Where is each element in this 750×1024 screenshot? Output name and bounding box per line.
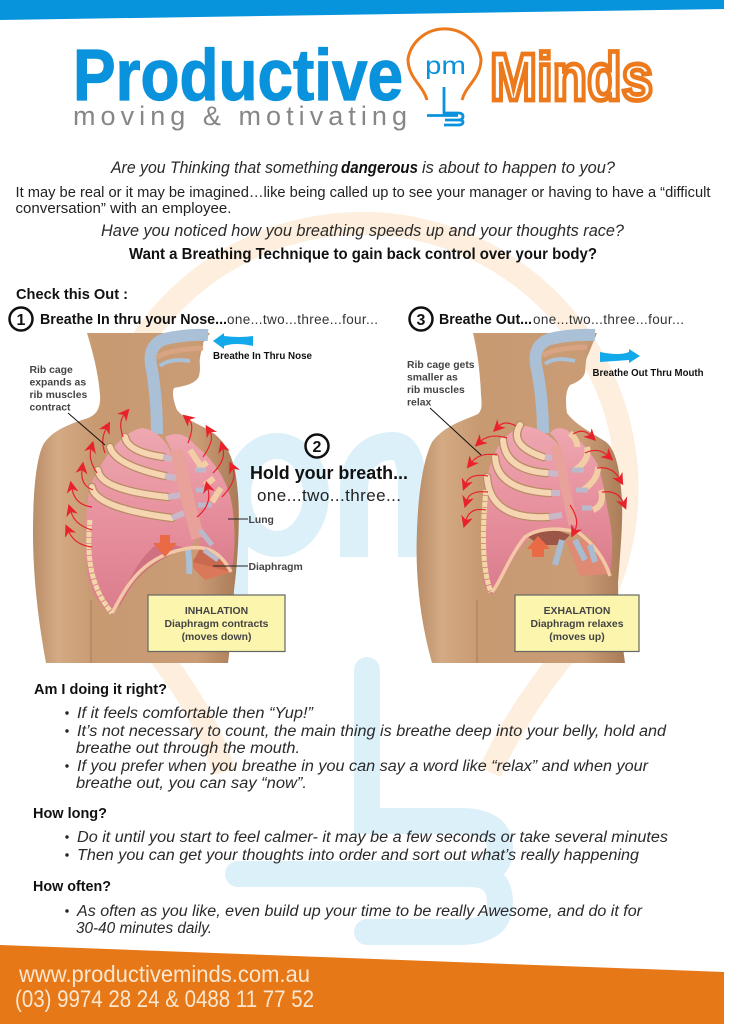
lungs — [483, 426, 574, 594]
body — [417, 333, 625, 663]
label: diaphragm: Diaphragm — [248, 562, 303, 573]
section: am I doing it right — [34, 681, 667, 792]
sternum — [556, 445, 573, 525]
logo wordmark: Productive: Productive — [73, 36, 403, 116]
caption: inhalation: INHALATION — [185, 606, 248, 617]
section: how long: How long? — [33, 805, 107, 822]
arrow: diaphragm up — [527, 536, 550, 557]
label: rib cage: relax — [407, 398, 431, 408]
call to action: Want a Breathing Technique to gain back control over your body? — [129, 246, 597, 263]
body — [33, 333, 239, 663]
section: how long: Do it until you start to feel calmer- it may be a few seconds or take several minutes — [77, 829, 668, 846]
number badge 3 — [410, 308, 432, 330]
label: rib cage: rib muscles — [30, 390, 87, 401]
logo wordmark: Minds: Minds — [490, 40, 653, 115]
diaphragm — [193, 558, 232, 580]
step 1 heading — [10, 308, 378, 330]
footer contact details: (03) 9974 28 24 & 0488 11 77 52 — [15, 986, 314, 1013]
ribs — [92, 437, 172, 518]
second question: Have you noticed how you breathing speeds up and your thoughts race? — [101, 222, 625, 240]
label: rib cage: Rib cage — [30, 365, 73, 376]
label: rib cage: rib muscles — [407, 385, 465, 396]
section: how long — [33, 805, 668, 864]
label: rib cage: Rib cage gets — [407, 360, 475, 371]
section: am I doing it right: If it feels comfortable then “Yup!” — [77, 705, 314, 722]
label: breathe in thru nose: Breathe In Thru Nose — [213, 350, 312, 362]
caption: inhalation: (moves down) — [182, 632, 251, 643]
step 2: hold your breath — [250, 434, 408, 505]
logo — [73, 29, 653, 131]
blue arrow: breathe in — [213, 333, 253, 349]
number badge 3: 3 — [417, 312, 426, 329]
footer contact details — [15, 961, 314, 1013]
section: how often: As often as you like, even build up your time to be really Awesome, and do it for — [76, 903, 643, 920]
footer banner — [0, 945, 724, 1024]
arrow: diaphragm down — [153, 535, 177, 557]
check this out heading: Check this Out : — [16, 286, 128, 303]
caption: exhalation: (moves up) — [549, 632, 605, 643]
label: rib cage: smaller as — [407, 372, 458, 384]
logo bulb icon: pm — [425, 52, 466, 80]
step 1 heading: Breathe In thru your Nose... — [40, 312, 227, 328]
section: am I doing it right: Am I doing it right? — [34, 681, 167, 698]
logo tagline: moving & motivating — [73, 101, 407, 131]
number badge 2 — [306, 434, 328, 458]
left illustration: inhalation — [30, 333, 303, 663]
step 3 heading — [410, 308, 684, 330]
contraction arrows — [466, 423, 623, 530]
section: how often: 30-40 minutes daily. — [76, 920, 212, 937]
caption: exhalation — [515, 595, 639, 652]
step 2: hold your breath: Hold your breath... — [250, 462, 408, 483]
number badge 2: 2 — [313, 439, 322, 456]
right illustration: exhalation — [407, 333, 639, 663]
intro question: dangerous — [341, 159, 418, 177]
intro paragraph: It may be real or it may be imagined…like being called up to see your manager or having to have a “difficult — [16, 185, 710, 201]
section: how long: Then you can get your thoughts into order and sort out what’s really happening — [77, 847, 639, 864]
label: rib cage — [30, 365, 105, 445]
step 3 heading: one...two...three...four... — [533, 312, 684, 327]
caption: inhalation — [148, 595, 285, 652]
ribs — [487, 425, 550, 517]
section: am I doing it right: If you prefer when you breathe in you can say a word like “relax” and when your — [77, 758, 649, 775]
blue arrow: breathe out — [600, 349, 640, 363]
intro paragraph — [16, 185, 710, 217]
watermark: pm letters and hand — [235, 446, 500, 932]
footer contact details: www.productiveminds.com.au — [18, 961, 310, 987]
diaphragm — [566, 540, 610, 576]
airway — [151, 335, 208, 434]
top banner — [0, 0, 724, 20]
intro question — [110, 159, 616, 177]
section: how often: How often? — [33, 878, 111, 895]
label: rib cage — [407, 360, 481, 455]
intro question: is about to happen to you? — [422, 159, 616, 177]
section: am I doing it right: breathe out through the mouth. — [76, 740, 300, 757]
expansion arrows — [69, 415, 234, 547]
label: diaphragm — [213, 562, 303, 573]
section: am I doing it right: It’s not necessary to count, the main thing is breathe deep into your belly, hold and — [77, 723, 667, 740]
lungs — [86, 428, 199, 615]
label: lung — [228, 515, 274, 526]
section: how often — [33, 878, 643, 937]
label: rib cage: expands as — [30, 378, 86, 388]
number badge 1: 1 — [17, 312, 26, 329]
label: rib cage: contract — [30, 402, 71, 414]
step 1 heading: one...two...three...four... — [227, 312, 378, 327]
label: breathe out thru mouth: Breathe Out Thru Mouth — [592, 367, 704, 379]
number badge 1 — [10, 308, 32, 330]
section: am I doing it right: breathe out, you can say “now”. — [76, 775, 307, 792]
intro question: Are you Thinking that something — [110, 159, 339, 177]
watermark: large light bulb outline — [97, 223, 627, 772]
sternum — [176, 450, 198, 538]
logo bulb icon — [408, 29, 481, 125]
caption: exhalation: EXHALATION — [544, 606, 610, 617]
caption: inhalation: Diaphragm contracts — [165, 619, 269, 630]
label: lung: Lung — [248, 515, 274, 526]
caption: exhalation: Diaphragm relaxes — [531, 619, 624, 630]
intro paragraph: conversation” with an employee. — [16, 201, 231, 217]
airway — [536, 335, 595, 433]
step 3 heading: Breathe Out... — [439, 312, 532, 328]
step 2: hold your breath: one...two...three... — [257, 486, 401, 505]
